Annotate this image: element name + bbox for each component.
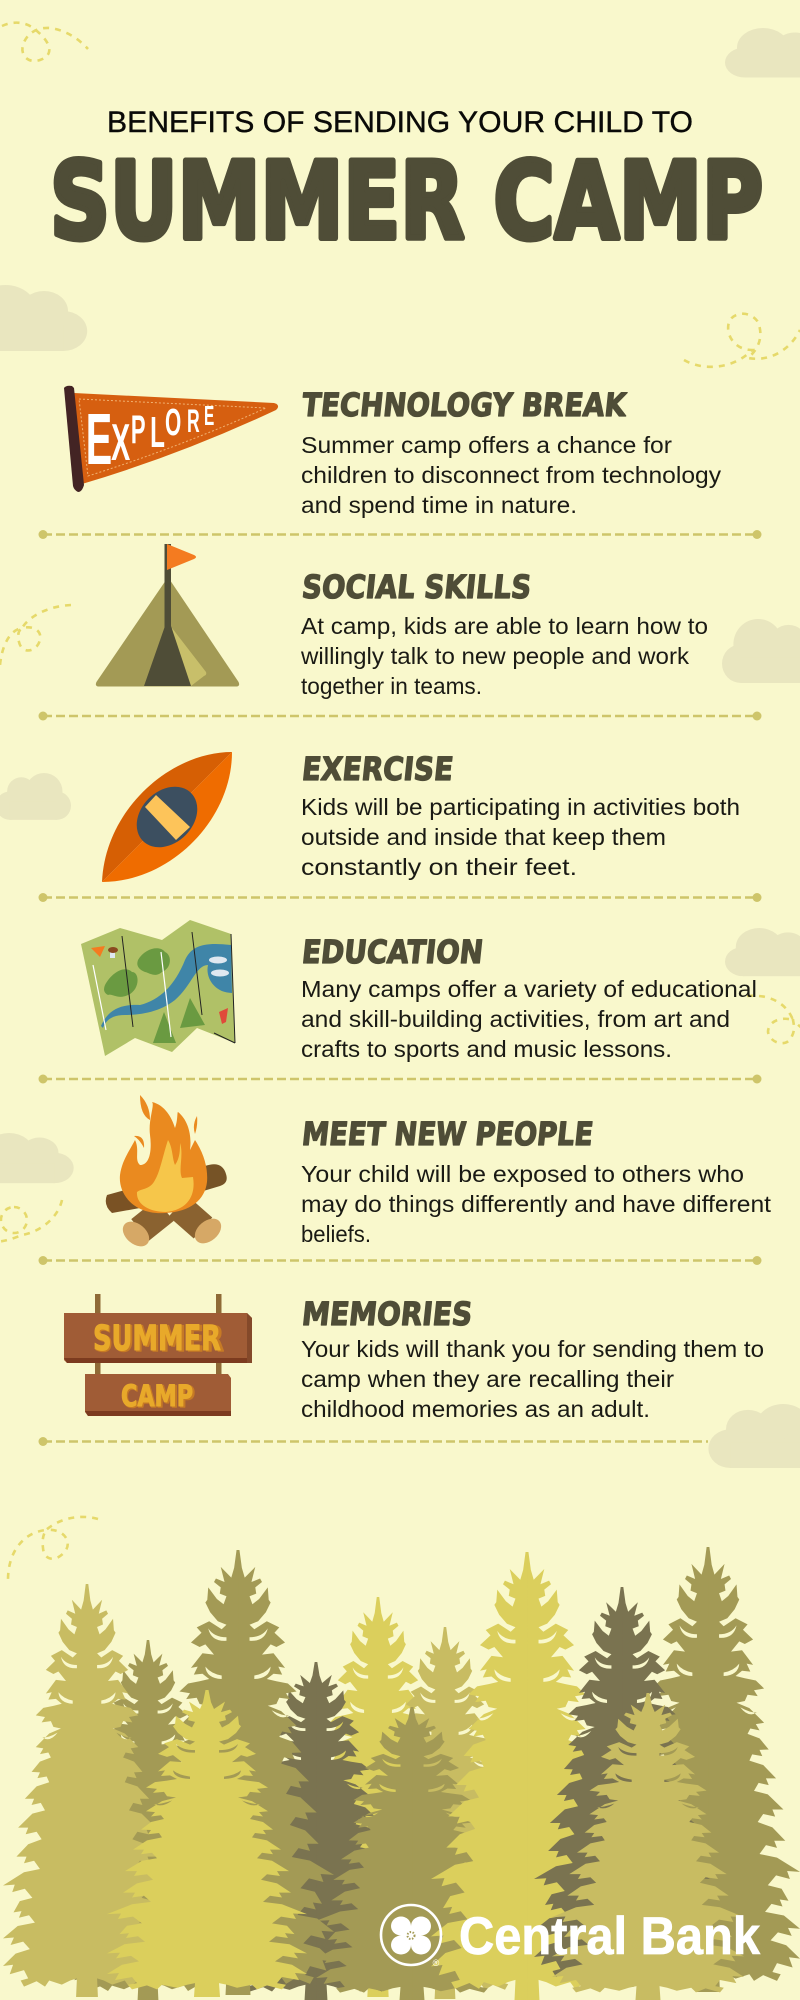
heading: SOCIAL SKILLS xyxy=(300,568,533,606)
icon: explore pennant: O xyxy=(165,402,181,444)
text block: Kids will be participating in activities both xyxy=(301,794,740,820)
text block: camp when they are recalling their xyxy=(301,1366,674,1392)
section: meet new people xyxy=(300,1115,771,1247)
text block: may do things differently and have different xyxy=(301,1191,771,1217)
dashed loop: left of meet new people xyxy=(0,1200,62,1242)
text block: outside and inside that keep them xyxy=(301,824,666,850)
text block xyxy=(301,432,721,518)
icon: summer camp wooden sign xyxy=(64,1294,252,1416)
cloud: left below title xyxy=(0,285,87,351)
dashed loop: right of education xyxy=(747,996,800,1043)
cloud: right of education xyxy=(725,928,800,976)
cloud: right of social skills xyxy=(722,619,800,683)
dashed loop: left of social skills xyxy=(0,605,71,665)
icon: summer camp wooden sign: CAMP xyxy=(122,1380,195,1414)
text block: Many camps offer a variety of educational xyxy=(301,976,757,1002)
icon: explore pennant: R xyxy=(187,405,200,439)
text block: and spend time in nature. xyxy=(301,492,577,518)
text block: beliefs. xyxy=(301,1221,371,1247)
section: education xyxy=(300,933,757,1062)
heading: EDUCATION xyxy=(300,933,485,971)
illustration: pine forest xyxy=(3,1547,800,2000)
cloud: right of memories xyxy=(708,1404,800,1468)
cloud: left of exercise xyxy=(0,773,71,820)
cloud: top right xyxy=(725,28,800,78)
icon: summer camp wooden sign: CAMP xyxy=(121,1379,193,1413)
icon: explore pennant: E xyxy=(204,400,214,431)
wordmark: Central Bank xyxy=(459,1907,760,1966)
icon: summer camp wooden sign: SUMMER xyxy=(94,1320,224,1360)
text block: constantly on their feet. xyxy=(301,854,577,880)
icon: tent with flag xyxy=(96,544,239,686)
text block: crafts to sports and music lessons. xyxy=(301,1036,672,1062)
dashed loop: top left xyxy=(2,23,88,61)
dashed loop: above trees xyxy=(8,1517,98,1580)
icon: explore pennant: X xyxy=(111,413,130,471)
icon: kayak xyxy=(102,752,232,882)
icon: explore pennant: L xyxy=(150,407,165,457)
icon: dogwood flower in circle: ® xyxy=(433,1958,440,1968)
icon: trail map xyxy=(81,920,235,1056)
heading: MEET NEW PEOPLE xyxy=(300,1115,595,1153)
text block: Your child will be exposed to others who xyxy=(301,1161,744,1187)
heading: TECHNOLOGY BREAK xyxy=(300,386,629,424)
text block: willingly talk to new people and work xyxy=(300,643,689,669)
icon: explore pennant xyxy=(64,386,278,492)
heading: EXERCISE xyxy=(300,750,455,788)
text block xyxy=(301,1336,764,1422)
text block xyxy=(301,976,757,1062)
section: technology break xyxy=(300,386,721,518)
text block: and skill-building activities, from art and xyxy=(301,1006,730,1032)
subtitle: BENEFITS OF SENDING YOUR CHILD TO xyxy=(107,106,693,139)
text block: together in teams. xyxy=(301,673,482,699)
text block: Your kids will thank you for sending them to xyxy=(301,1336,764,1362)
logo: central bank xyxy=(381,1905,760,1968)
text block xyxy=(301,794,740,880)
text block xyxy=(301,1161,771,1247)
icon: dogwood flower in circle xyxy=(381,1905,441,1968)
icon: explore pennant: P xyxy=(131,407,146,452)
text block: At camp, kids are able to learn how to xyxy=(301,613,708,639)
section: exercise xyxy=(300,750,740,880)
icon: explore pennant: E xyxy=(86,400,112,480)
text block: Summer camp offers a chance for xyxy=(301,432,672,458)
dashed loop: right below title xyxy=(684,314,800,367)
section: social skills xyxy=(300,568,708,699)
cloud: left of meet new people xyxy=(0,1133,74,1183)
icon: campfire xyxy=(106,1095,227,1251)
text block: children to disconnect from technology xyxy=(301,462,721,488)
section: memories xyxy=(300,1295,764,1422)
text block xyxy=(300,613,708,699)
text block: childhood memories as an adult. xyxy=(301,1396,650,1422)
icon: summer camp wooden sign: SUMMER xyxy=(93,1319,221,1359)
heading: MEMORIES xyxy=(300,1295,474,1333)
